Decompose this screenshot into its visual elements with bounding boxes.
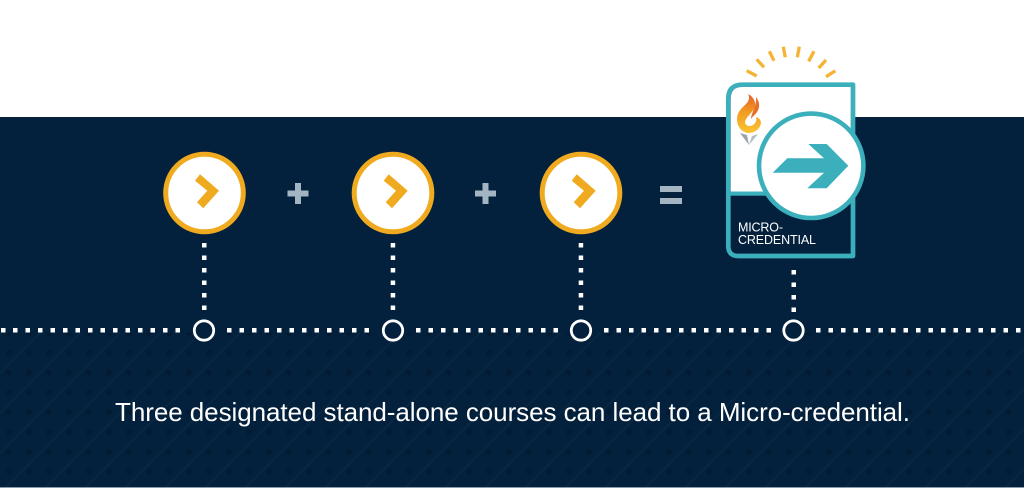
white header background <box>0 0 1024 117</box>
badge timeline marker <box>784 321 803 340</box>
course 3 icon <box>542 154 620 232</box>
sunburst rays <box>747 47 835 77</box>
course 1 icon <box>166 154 243 232</box>
badge label: CREDENTIAL <box>738 233 816 247</box>
micro-credential node <box>728 47 863 340</box>
navy background band <box>0 117 1024 488</box>
caption: Three designated stand-alone courses can lead to a Micro-credential. <box>115 397 910 427</box>
course 1 timeline marker <box>194 321 214 340</box>
arrow circle <box>759 114 863 218</box>
dotted background pattern <box>0 333 1024 488</box>
course 2 node <box>354 154 432 340</box>
course 2 timeline marker <box>383 321 403 340</box>
badge connector <box>792 270 796 312</box>
plus sign 1 <box>288 183 308 204</box>
course 1 node <box>166 154 243 340</box>
course 3 node <box>542 154 620 340</box>
course 3 connector <box>579 243 583 310</box>
badge label: MICRO- <box>738 221 783 235</box>
icon: torch flame <box>737 94 761 145</box>
badge <box>728 85 863 256</box>
horizontal dotted timeline <box>1 328 1020 332</box>
badge upper white panel <box>731 87 851 192</box>
badge divider <box>728 192 853 196</box>
course 1 connector <box>202 243 206 310</box>
badge body <box>728 85 853 256</box>
plus sign 2 <box>475 183 496 204</box>
equals sign <box>660 186 682 204</box>
course 2 connector <box>391 243 395 310</box>
course 2 icon <box>354 154 432 232</box>
course 3 timeline marker <box>571 321 591 340</box>
